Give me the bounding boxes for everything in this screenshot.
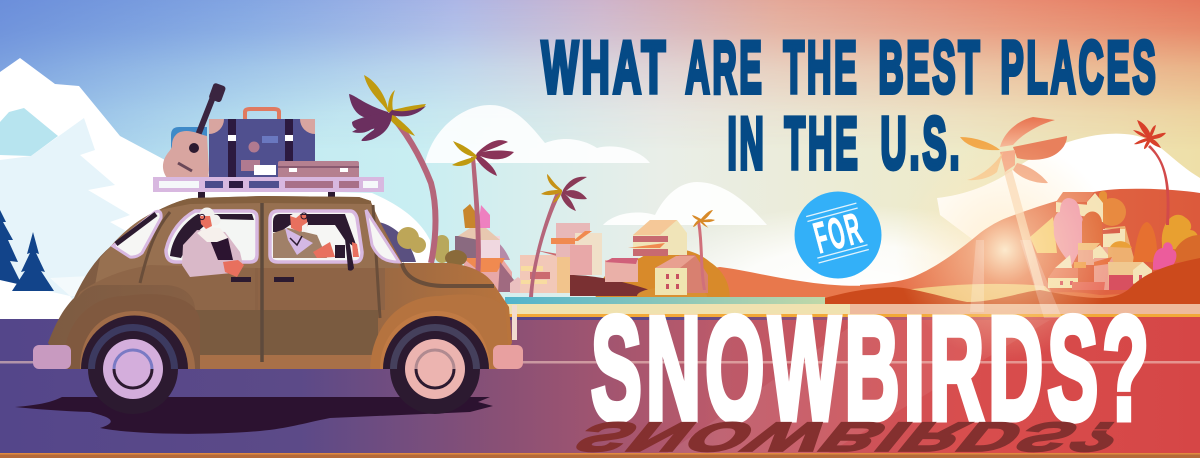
palm tree: small red [1133,120,1170,225]
blue case [171,127,207,187]
woman passenger [182,208,244,277]
lower body band [195,310,378,355]
foreground dark orange hills [805,258,1200,308]
title line 2: THE [784,104,860,184]
title line 1: ARE [686,28,764,108]
palm tree: second [452,140,514,278]
palm tree: large [349,75,436,263]
door handles [231,277,251,282]
snowy mountains [0,58,430,320]
large blue suitcase [209,109,315,187]
palm tree: faded by sunlight [960,117,1067,290]
palm tree: small distant [692,210,715,290]
rear fender [64,294,200,369]
badge: FOR [794,192,882,278]
front door window with driver [270,211,362,271]
road with stripes [0,304,1200,458]
guitar [163,82,226,187]
title line 1 [542,28,1158,108]
title [542,28,1158,184]
car body [48,196,512,369]
roof luggage [163,82,359,187]
right village [1030,191,1200,290]
windshield [366,210,399,262]
small brown suitcase [254,161,359,187]
clouds [425,105,1200,385]
title line 2: IN [728,104,766,184]
village: middle houses [455,220,708,295]
palm tree: third [529,174,587,297]
man driver [273,213,359,271]
roadside trees [397,204,490,266]
rear quarter window [113,211,161,257]
rear door window with passenger [166,208,257,277]
title line 2 [728,104,962,184]
middle hills [450,236,880,305]
front wheel [383,316,489,414]
upper window band [95,200,400,285]
title line 1: BEST [878,28,982,108]
rear bumper [33,345,71,369]
badge: FOR: FOR [809,203,868,263]
title line 1: WHAT [542,28,668,108]
title line 1: THE [784,28,860,108]
water [505,297,825,304]
car shadow [15,397,493,434]
roof rack [153,177,384,198]
sky background [0,0,1200,330]
sun glow and rays [895,140,1115,360]
door seams [260,203,264,362]
right hills [860,189,1200,305]
front fender [370,294,510,369]
pink tree [1053,198,1084,265]
pine trees [0,210,54,291]
title: U.S. [880,104,962,184]
rear wheel [81,316,188,399]
front bumper [493,305,523,369]
car [33,196,523,414]
